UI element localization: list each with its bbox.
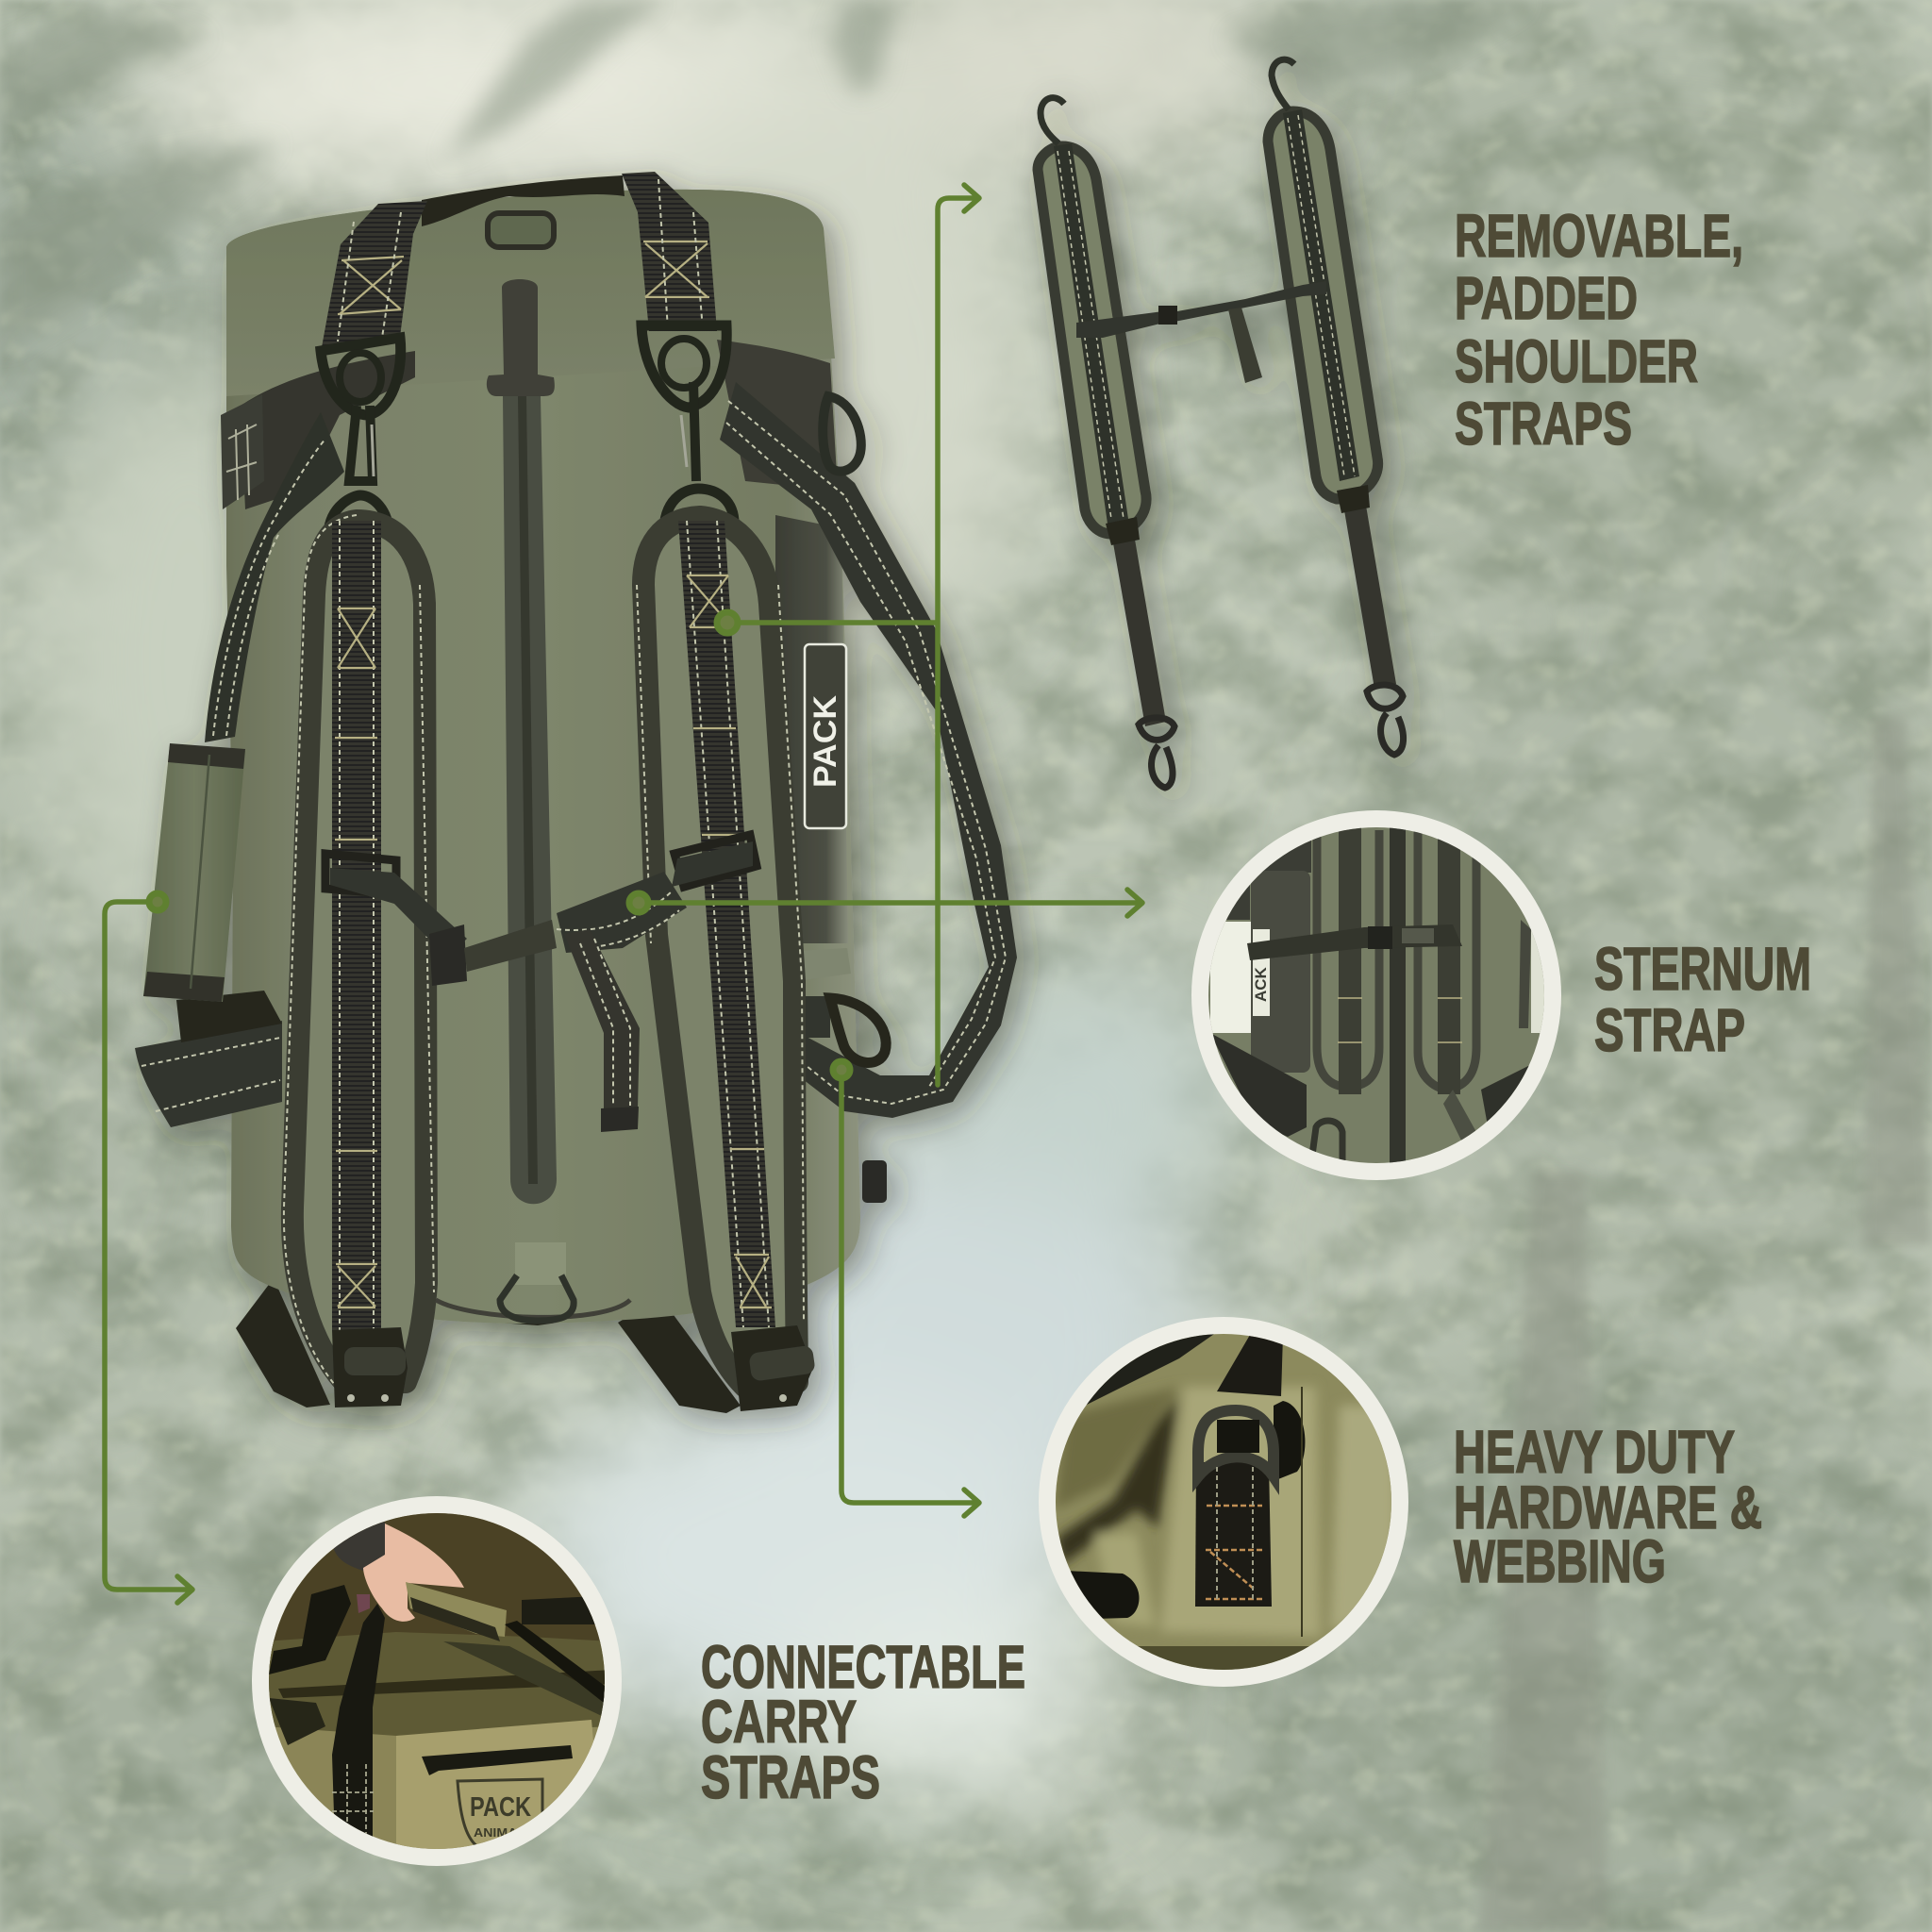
side lower strap (135, 991, 282, 1127)
heading: sternum strap: STRAP (1594, 996, 1745, 1064)
left cinch buckle (221, 394, 264, 509)
upper left shoulder webbing (322, 201, 427, 347)
right lower strap and hook (1337, 485, 1404, 755)
heading: connectable carry straps: STRAPS (701, 1743, 880, 1811)
right hardware (641, 325, 734, 528)
left hardware (321, 338, 401, 534)
heading: connectable carry straps: CONNECTABLE (701, 1633, 1025, 1701)
right long carry strap (720, 382, 1017, 1118)
heading: connectable carry straps (701, 1633, 1025, 1811)
dark side panel (775, 515, 848, 943)
heading: heavy duty hardware and webbing: HEAVY DUTY (1454, 1418, 1735, 1486)
left padded harness (284, 515, 434, 1391)
arrow: sternum strap (629, 890, 1142, 916)
arrow: carry straps (105, 893, 192, 1603)
left shoulder pad (1038, 146, 1146, 534)
circle photo: connectable carry straps in use: PACK (470, 1792, 531, 1823)
heading: connectable carry straps: CARRY (701, 1688, 857, 1756)
heading: removable padded shoulder straps: PADDED (1455, 264, 1638, 332)
upper right shoulder webbing (622, 172, 717, 331)
circle photo: sternum strap detail: ACK (1252, 966, 1270, 1002)
upper right ring (823, 396, 861, 472)
carry grip tube (143, 743, 245, 1002)
left side carry strap (205, 412, 344, 742)
arrows (105, 185, 1142, 1603)
heading: heavy duty hardware and webbing: WEBBING (1454, 1527, 1666, 1595)
left lower strap and hook (1106, 517, 1174, 788)
arrow: shoulder straps (717, 185, 979, 1085)
pack logo (805, 644, 846, 828)
left harness webbing (332, 521, 381, 1330)
side knob (862, 1160, 887, 1203)
top hooks (1041, 59, 1294, 143)
circle photo: connectable carry straps in use (252, 1496, 622, 1866)
grab handle (422, 175, 625, 226)
heading: removable padded shoulder straps (1455, 202, 1743, 458)
bottom left buckle (332, 1327, 408, 1407)
lower right ring (803, 996, 886, 1062)
heading: removable padded shoulder straps: REMOVABLE, (1455, 202, 1743, 270)
heading: heavy duty hardware and webbing: HARDWARE & (1454, 1474, 1762, 1541)
zipper (487, 279, 557, 1204)
main product: duffel backpack (135, 172, 1017, 1413)
pack logo: PACK (808, 695, 843, 788)
right pad webbing (1283, 109, 1359, 481)
heading: heavy duty hardware and webbing (1454, 1418, 1762, 1595)
pack body cylinder (226, 190, 860, 1324)
lighter band on panel (797, 948, 851, 981)
bottom seam curve (436, 1300, 630, 1317)
heading: sternum strap: STERNUM (1594, 935, 1811, 1003)
upper compression band (241, 351, 415, 509)
dangling strap tail (564, 929, 640, 1132)
sternum strap (325, 835, 757, 986)
sternum cross strap and buckle (1076, 281, 1326, 383)
top D-ring (488, 213, 554, 247)
lower pack wings (236, 1278, 741, 1413)
circle photo: connectable carry straps in use: ANIMAL (474, 1825, 525, 1840)
heading: removable padded shoulder straps: STRAPS (1455, 390, 1632, 458)
top cap shading (226, 190, 835, 396)
bottom D-ring and tab (500, 1242, 574, 1321)
arrow: hardware (833, 1061, 979, 1516)
right padded harness (637, 517, 804, 1387)
right shoulder pad (1268, 111, 1378, 499)
bottom right buckle (731, 1325, 816, 1411)
left pad webbing (1054, 143, 1128, 524)
circle photo: heavy duty hardware detail (1039, 1317, 1408, 1687)
right harness webbing (678, 521, 775, 1327)
heading: sternum strap (1594, 935, 1811, 1064)
circle photo: sternum strap detail (1191, 810, 1561, 1180)
removable shoulder straps (1038, 59, 1404, 788)
upper band right (717, 340, 838, 491)
heading: removable padded shoulder straps: SHOULDER (1455, 327, 1698, 395)
